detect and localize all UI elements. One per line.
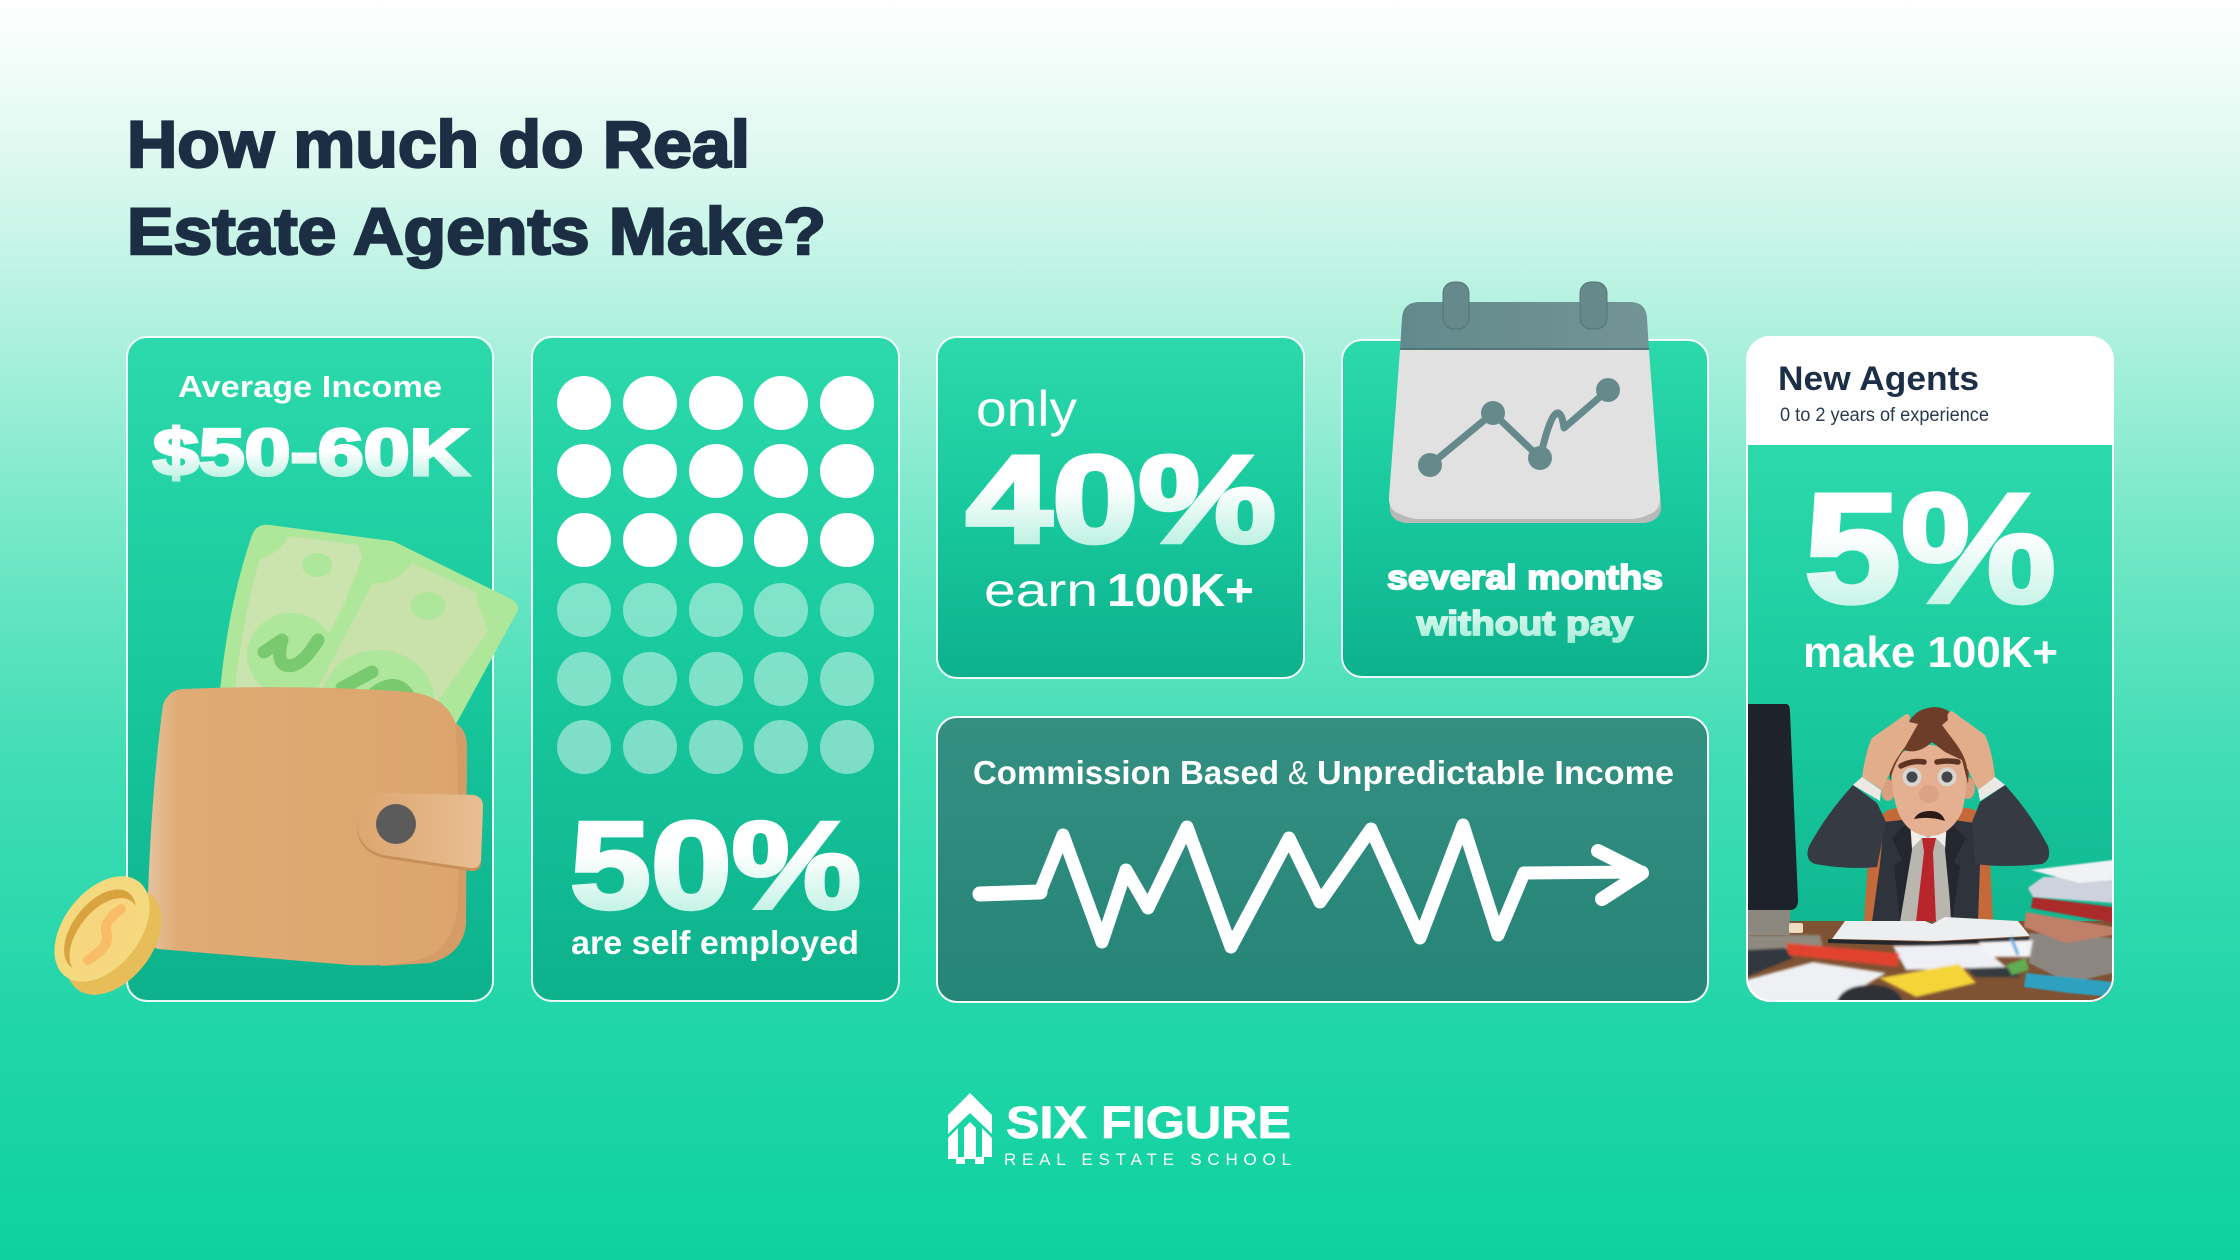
chair [1864,808,1993,922]
panel: commission based income [937,717,1708,1002]
wallet body [147,687,459,965]
panel: average income [127,337,493,1001]
commission heading: & [1288,754,1308,791]
new agents border [1747,337,2113,1001]
eyes [1902,768,1956,786]
front banknote [297,540,518,750]
icon: calendar with line chart [1389,282,1661,523]
logo tagline: REAL ESTATE SCHOOL [1004,1150,1291,1169]
make 100K label: make 100K+ [1803,628,2058,677]
average income value: $50-60K [153,415,469,489]
hair [1890,707,1969,784]
ears [1881,777,1975,801]
gold coin [35,858,181,1013]
average income label: Average Income [178,369,442,404]
logo wordmark: SIX FIGURE [1006,1097,1291,1148]
title [127,107,826,268]
arrow: volatile income line [980,825,1642,947]
50 percent value: 50% [570,797,861,935]
new agents heading: New Agents [1778,360,1979,398]
icon: wallet with cash and coin [35,525,518,1013]
book stack [2024,860,2113,997]
wallet back layer [380,720,467,966]
open book [1832,917,2030,941]
several months label: several months [1387,559,1663,597]
hands [1862,714,1918,790]
earn 100K label [984,564,1254,616]
title: Estate Agents Make? [127,194,826,268]
illustration: stressed agent at desk [1746,704,2114,1003]
head [1892,745,1966,836]
monitor [1746,704,1798,910]
cream object [1789,923,1803,933]
monitor stand [1746,910,1790,935]
collar [1910,830,1946,848]
suit jacket [1872,819,1980,922]
left arm [1807,785,1886,868]
mouth [1914,811,1945,821]
tie [1916,838,1936,922]
panel: only 40 percent [937,337,1304,678]
panel: new agents [1746,336,2114,1003]
back banknote [220,525,392,700]
desk clutter [1746,935,2033,1003]
experience subheading: 0 to 2 years of experience [1780,405,1989,426]
nose [1919,785,1939,803]
lapels [1892,820,1966,922]
right arm [1972,785,2049,866]
wallet strap [357,793,483,871]
title: How much do Real [127,107,750,181]
cuffs [1853,777,2005,801]
commission heading: Unpredictable Income [1317,754,1674,791]
logo: six figure real estate school [948,1093,1291,1169]
commission heading [973,754,1674,791]
earn 100K label: earn [984,564,1098,616]
desk [1746,921,2114,1003]
only label: only [976,381,1077,437]
5 percent value: 5% [1804,462,2056,636]
commission heading: Commission Based [973,754,1279,791]
brows [1901,761,1958,766]
icon: house with bars [948,1093,992,1164]
without pay label: without pay [1416,605,1633,643]
40 percent value: 40% [966,431,1276,569]
dot grid: 50 percent [557,376,874,774]
panel: several months without pay [1342,282,1708,677]
panel: self employed [532,337,899,1001]
shirt [1900,832,1951,922]
wallet button [376,804,416,844]
earn 100K label: 100K+ [1107,564,1254,616]
self employed label: are self employed [571,924,859,961]
